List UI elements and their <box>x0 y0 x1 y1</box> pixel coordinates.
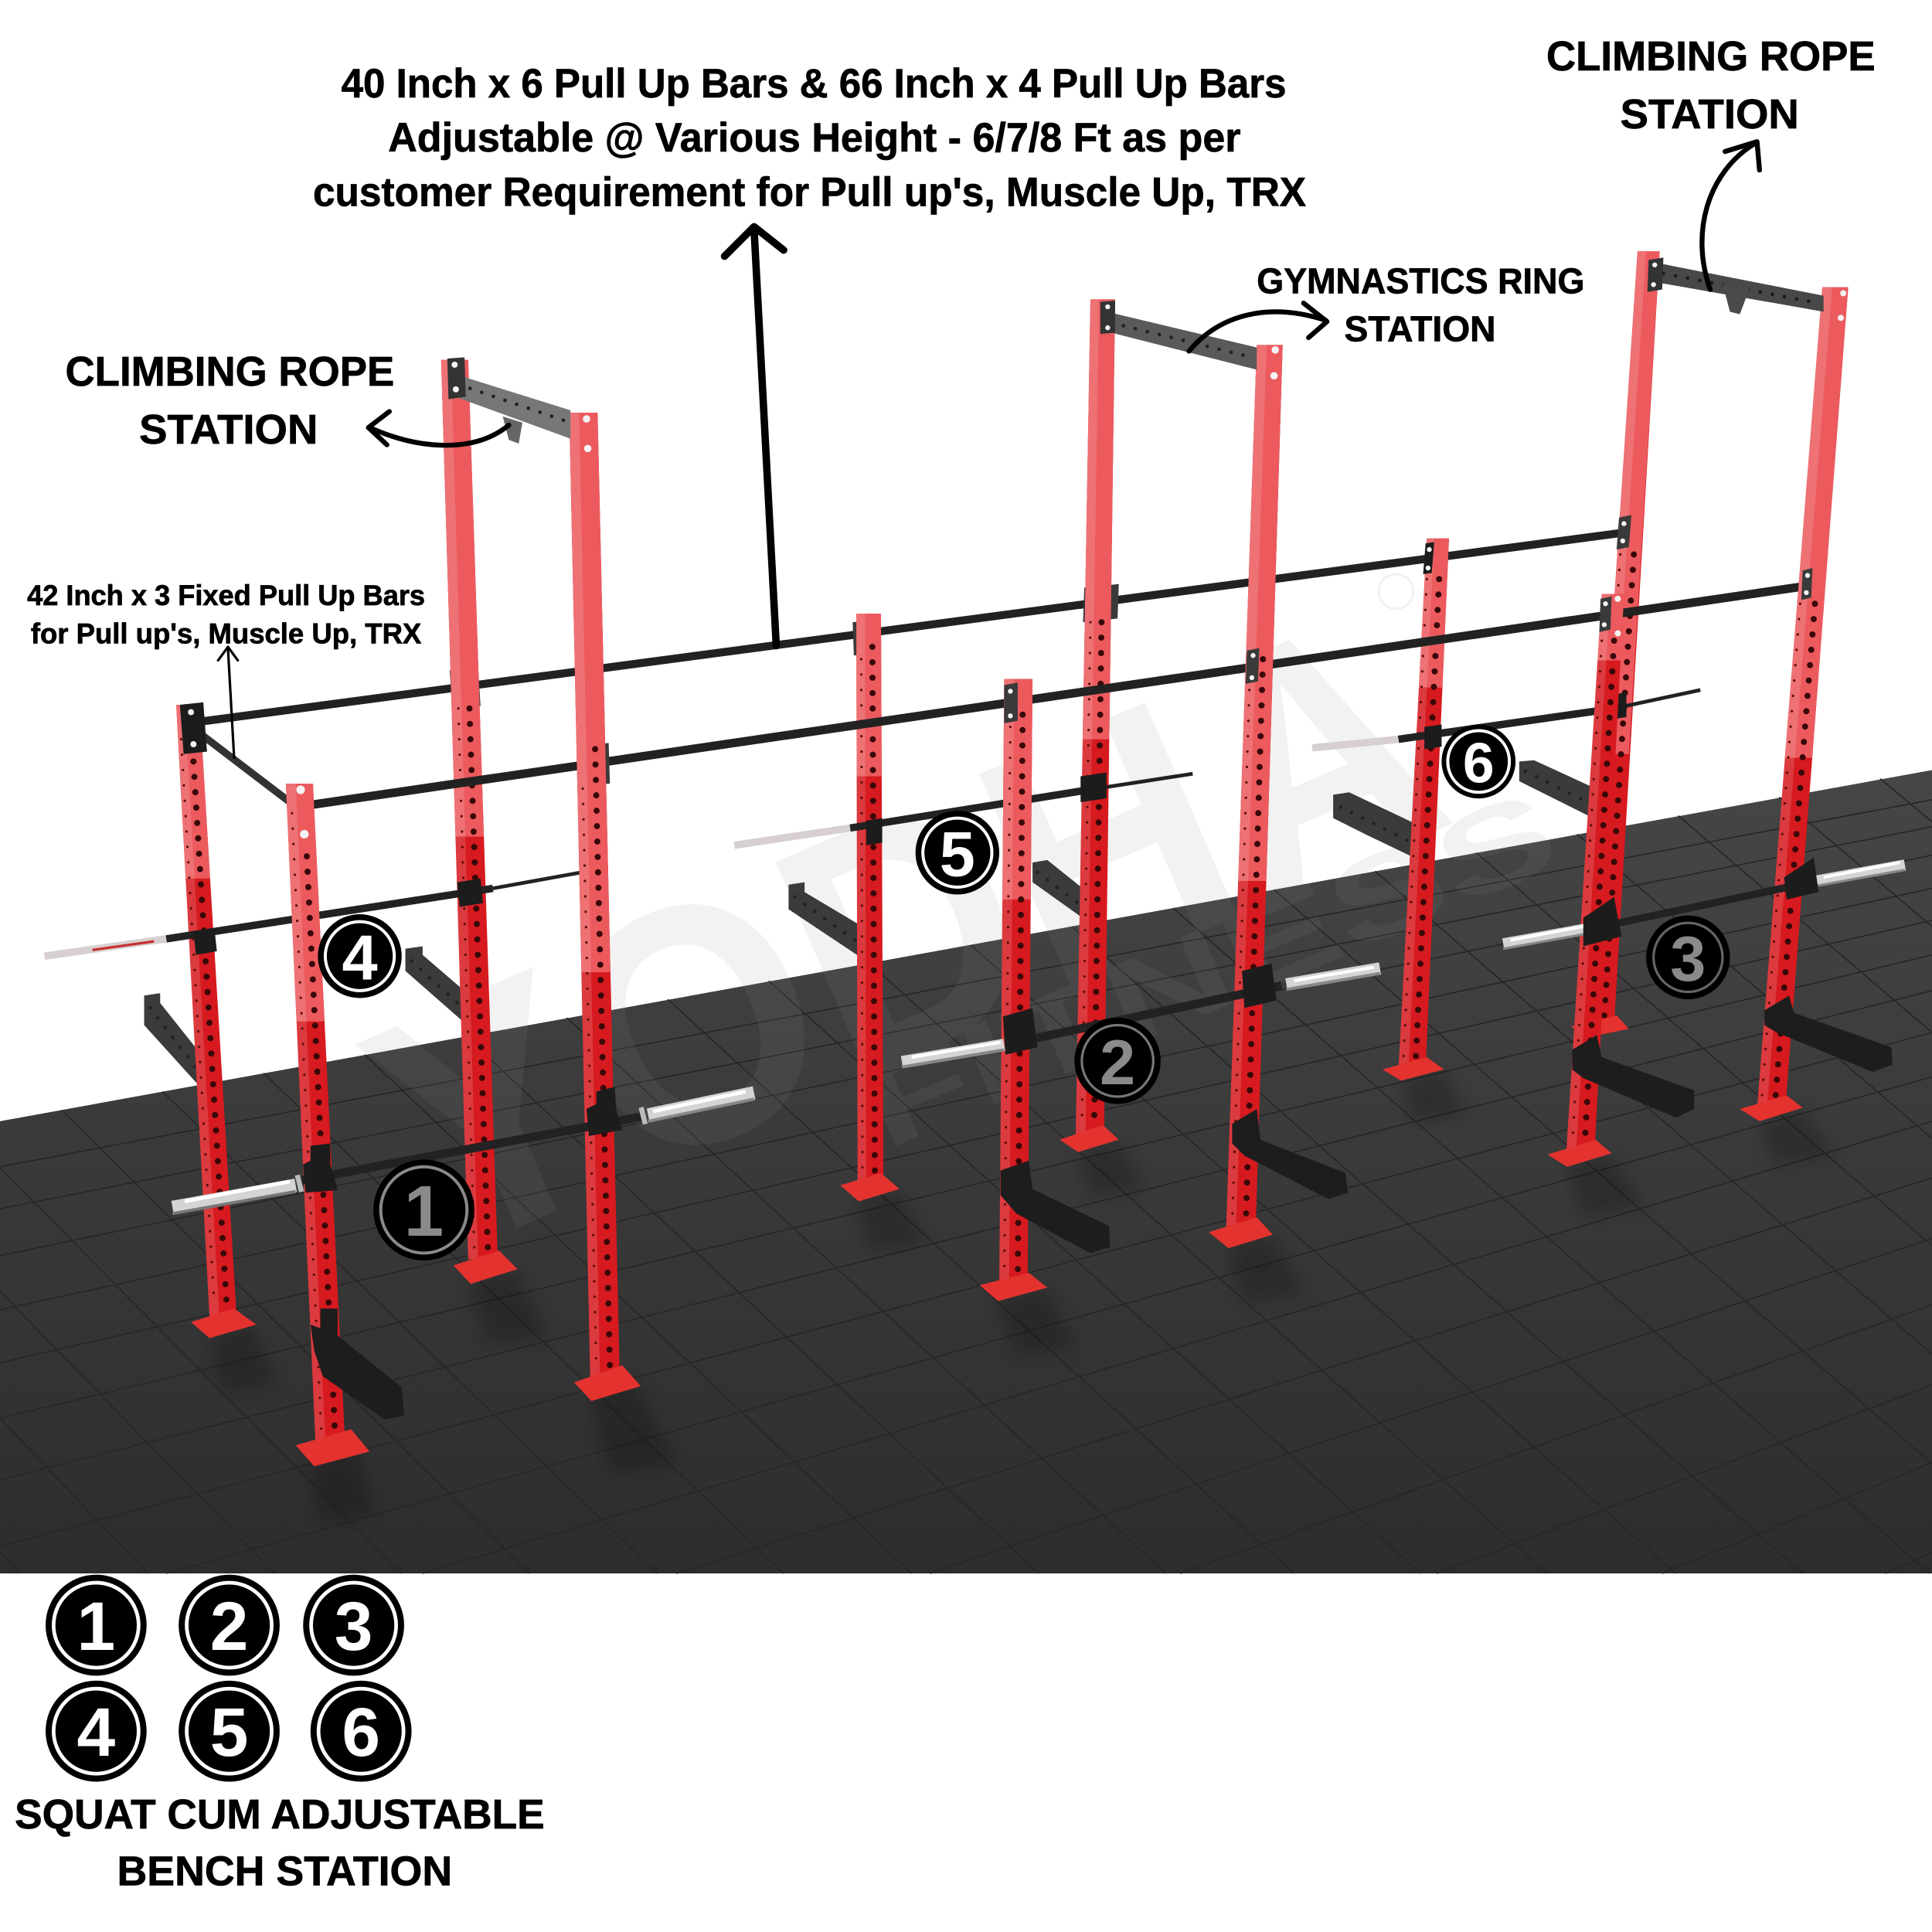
floor <box>0 770 1932 1573</box>
arrow: main up arrow <box>725 226 784 645</box>
post: rear right short <box>1383 539 1449 1080</box>
legend caption <box>15 1791 545 1894</box>
front pull up bar <box>313 585 1811 804</box>
post: rear left tall <box>441 360 518 1284</box>
label: climbing rope station right: STATION <box>1621 91 1799 138</box>
crossbeam: gymnastics ring station <box>1100 301 1257 369</box>
label: climbing rope station left: CLIMBING ROPE <box>66 349 394 395</box>
crossbeam: right climbing rope station <box>1648 257 1824 315</box>
watermark: brand logo: YODHA <box>321 539 1488 1326</box>
label: climbing rope station right <box>1546 33 1876 138</box>
heading: adjustable pull up bars: 40 Inch x 6 Pull Up Bars & 66 Inch x 4 Pull Up Bars <box>342 61 1287 107</box>
legend badge 2 <box>179 1575 280 1675</box>
badge 5: 5 <box>940 818 975 890</box>
post: front left tall <box>570 413 641 1401</box>
post: front middle tall <box>1209 345 1283 1248</box>
label: fixed pull up bars <box>27 580 425 649</box>
crossbeam: left climbing rope station <box>447 357 570 444</box>
barbell 6 <box>1312 690 1700 749</box>
rear pull up bar <box>197 532 1627 722</box>
label: gymnastics ring station: STATION <box>1344 309 1496 349</box>
barbell 1 <box>172 1087 754 1213</box>
legend badge 5 <box>179 1681 280 1781</box>
arrow: fixed bar <box>218 647 238 758</box>
legend badge 4: 4 <box>77 1693 116 1770</box>
legend badge 6: 6 <box>342 1693 380 1770</box>
badge 6 <box>1441 725 1515 798</box>
badge 1 <box>373 1159 474 1260</box>
legend badge 3 <box>303 1575 404 1675</box>
badge 5 <box>916 811 999 895</box>
legend badge 3: 3 <box>335 1587 372 1665</box>
badge 3 <box>1646 916 1730 999</box>
label: gymnastics ring station: GYMNASTICS RING <box>1257 260 1584 301</box>
badge 4: 4 <box>342 922 378 994</box>
arrow: right climbing rope <box>1702 141 1760 290</box>
barbell 5 <box>734 773 1192 845</box>
badge 4 <box>318 914 402 998</box>
rear bar brackets in front of posts <box>180 515 1631 754</box>
legend caption: SQUAT CUM ADJUSTABLE <box>15 1791 545 1838</box>
legend badge 1: 1 <box>77 1587 115 1665</box>
arrow: left climbing rope <box>369 412 509 445</box>
label: fixed pull up bars: 42 Inch x 3 Fixed Pull Up Bars <box>27 580 425 611</box>
watermark: brand logo: FITNESS <box>844 765 1575 1175</box>
legend badge 1 <box>46 1575 147 1675</box>
legend badge 4 <box>46 1681 147 1781</box>
badge 2 <box>1074 1018 1161 1104</box>
post: front right tall <box>1740 287 1849 1121</box>
rear spotter arms <box>145 760 1596 1090</box>
barbell 4 <box>44 872 582 956</box>
badge 2: 2 <box>1100 1026 1135 1098</box>
heading: adjustable pull up bars <box>313 61 1306 215</box>
post: rear middle tall <box>1060 299 1119 1152</box>
label: gymnastics ring station <box>1257 260 1584 349</box>
legend badge 2: 2 <box>210 1587 248 1665</box>
heading: adjustable pull up bars: Adjustable @ Various Height - 6/7/8 Ft as per <box>388 115 1241 161</box>
post: rear middle short <box>840 614 900 1202</box>
arrow: gymnastics ring <box>1189 303 1327 351</box>
legend badge 6 <box>311 1681 412 1781</box>
legend caption: BENCH STATION <box>117 1848 452 1894</box>
front spotter arms <box>311 995 1893 1420</box>
post: rear left short <box>176 705 257 1338</box>
label: climbing rope station left <box>66 349 394 453</box>
front bar brackets in front of posts <box>1004 568 1812 723</box>
front bar tabs behind posts <box>578 743 610 786</box>
barbell 3 <box>1503 858 1905 949</box>
label: climbing rope station left: STATION <box>139 406 318 453</box>
post: rear right tall <box>1571 251 1660 1037</box>
badge 6: 6 <box>1463 731 1495 794</box>
badge 1: 1 <box>404 1171 444 1251</box>
badge 3: 3 <box>1670 923 1706 995</box>
label: climbing rope station right: CLIMBING ROPE <box>1546 33 1876 80</box>
post: front left short <box>286 784 369 1466</box>
legend badge 5: 5 <box>210 1693 248 1770</box>
label: fixed pull up bars: for Pull up's, Muscle Up, TRX <box>31 617 422 649</box>
side fixed pull up bar <box>195 730 288 801</box>
post: front middle short <box>980 679 1047 1301</box>
post: front right short <box>1548 594 1624 1167</box>
barbell 2 <box>902 964 1380 1067</box>
rear bar brackets behind posts <box>450 584 1119 709</box>
heading: adjustable pull up bars: customer Requirement for Pull up's, Muscle Up, TRX <box>313 169 1306 215</box>
